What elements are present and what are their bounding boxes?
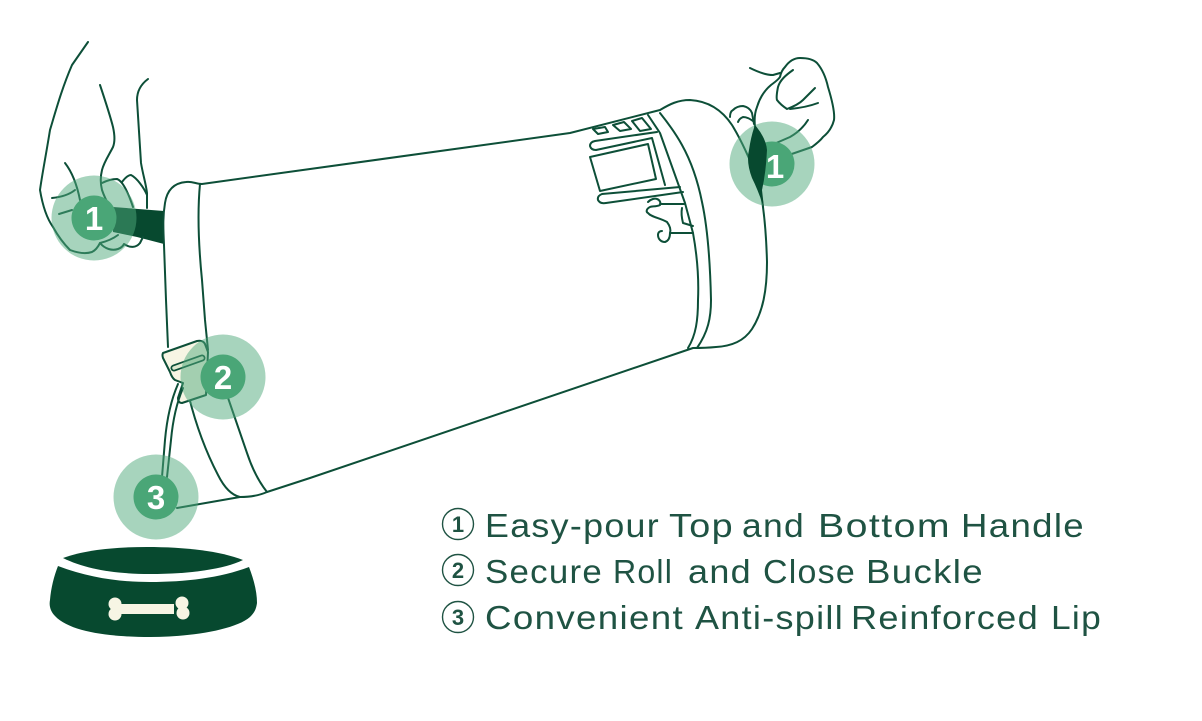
badge 1 right: 1 — [766, 148, 784, 185]
legend item 1: Handle — [961, 507, 1085, 544]
legend — [442, 507, 1102, 636]
badge 1 left: 1 — [85, 200, 103, 237]
bag label and hook details — [590, 118, 693, 242]
badge 1 right — [730, 122, 814, 208]
legend item 1 — [442, 507, 1085, 544]
legend item 1: Top — [669, 507, 734, 544]
top handle strap — [748, 125, 767, 208]
badge 3: 3 — [147, 479, 165, 516]
icon: bone — [108, 596, 190, 620]
legend item 2: Close — [763, 553, 856, 590]
legend item 1: and — [742, 507, 805, 544]
legend item 1: 1 — [452, 512, 464, 537]
right hand — [730, 58, 834, 163]
legend item 3 — [442, 599, 1102, 636]
left hand — [40, 42, 148, 253]
legend item 2: 2 — [452, 558, 464, 583]
badge 2: 2 — [214, 359, 232, 396]
legend item 3: Lip — [1051, 599, 1102, 636]
legend item 2: Roll — [613, 553, 673, 590]
buckle — [162, 341, 208, 403]
dog bowl — [50, 547, 257, 637]
legend item 2: and — [688, 553, 752, 590]
legend item 3: Convenient — [485, 599, 684, 636]
bag outline — [163, 100, 767, 508]
legend item 3: Anti-spill — [695, 599, 844, 636]
legend item 1: Easy-pour — [485, 507, 660, 544]
legend item 2: Buckle — [866, 553, 984, 590]
legend item 2: Secure — [485, 553, 603, 590]
badge 3 — [114, 454, 198, 540]
badge 1 left — [52, 176, 136, 260]
legend item 1: Bottom — [818, 507, 951, 544]
badge 2 — [180, 334, 266, 420]
legend item 3: 3 — [452, 605, 464, 630]
buckle strap — [162, 384, 183, 477]
legend item 3: Reinforced — [851, 599, 1039, 636]
legend item 2 — [442, 553, 984, 590]
bottom handle strap — [113, 207, 164, 244]
